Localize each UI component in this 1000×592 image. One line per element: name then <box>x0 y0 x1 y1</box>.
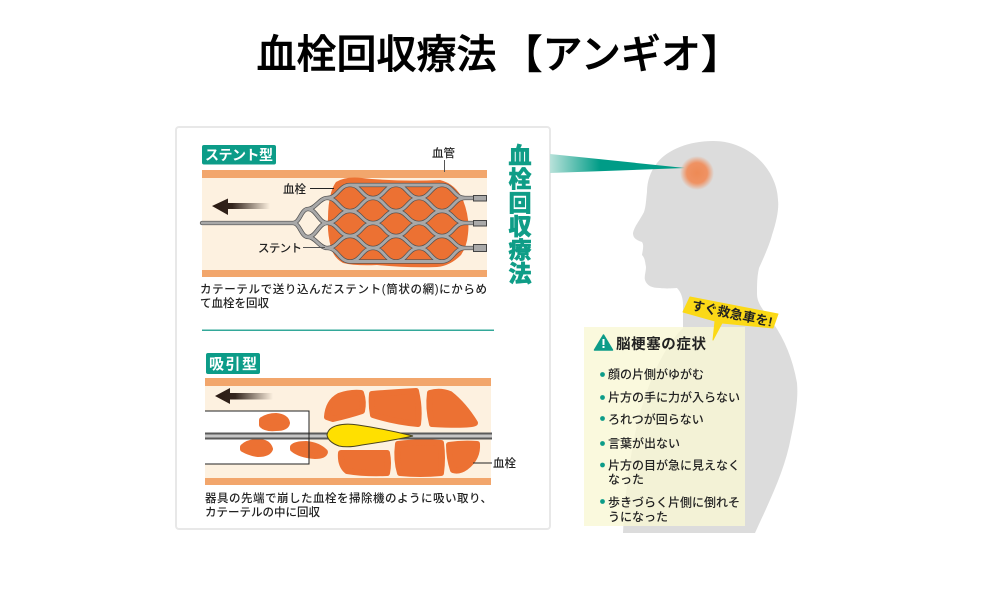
vertical heading <box>508 142 532 286</box>
symptom list: 歩きづらく片側に倒れそ <box>608 494 740 510</box>
catheter box <box>205 411 309 464</box>
symptom list: 言葉が出ない <box>608 436 680 450</box>
catheter tube <box>205 432 492 440</box>
vertical heading: 療 <box>508 237 532 263</box>
callout: call ambulance <box>683 297 778 340</box>
label: blood vessel <box>432 146 455 172</box>
symptom list: 片方の目が急に見えなく <box>608 458 740 472</box>
catheter box right edge <box>308 411 310 464</box>
vertical heading: 血 <box>508 142 532 168</box>
vertical heading: 法 <box>508 260 532 286</box>
caption: stent type: て血栓を回収 <box>200 296 269 310</box>
human silhouette <box>623 141 797 533</box>
panel: treatment methods <box>176 127 550 529</box>
label: stent <box>258 242 325 255</box>
arrow: left <box>212 198 270 215</box>
icon: warning <box>594 335 612 350</box>
stent end markers <box>474 196 486 252</box>
vertical heading: 栓 <box>508 166 532 192</box>
symptom list: 顔の片側がゆがむ <box>608 366 704 382</box>
caption: stent type: カテーテルで送り込んだステント(筒状の網)にからめ <box>200 282 487 296</box>
symptom list: なった <box>608 472 644 486</box>
stent mesh <box>202 185 474 262</box>
vertical heading: 回 <box>508 190 532 216</box>
label: stent type: ステント型 <box>205 147 273 163</box>
suction tip <box>327 424 413 447</box>
label: clot <box>473 456 516 470</box>
heading: 脳梗塞の症状 <box>616 335 706 353</box>
stroke location spot <box>680 156 714 190</box>
clot fragments <box>243 391 477 474</box>
label: blood vessel: 血管 <box>432 146 455 160</box>
callout: call ambulance: すぐ救急車を! <box>690 298 774 330</box>
diagram: stent type vessel <box>202 170 487 277</box>
caption: aspiration type: カテーテルの中に回収 <box>205 505 320 519</box>
arrow: left <box>215 388 273 404</box>
vertical heading: 収 <box>508 214 532 240</box>
symptom list: 片方の手に力が入らない <box>608 390 740 404</box>
label: aspiration type: 吸引型 <box>209 356 257 373</box>
symptom list <box>600 366 740 524</box>
label: clot <box>283 182 334 196</box>
panel: symptoms <box>584 327 745 526</box>
diagram: aspiration type vessel <box>205 378 492 485</box>
symptom list: ろれつが回らない <box>608 412 704 426</box>
label: clot: 血栓 <box>283 182 306 196</box>
title: 血栓回収療法【アンギオ】 <box>256 33 741 77</box>
blood clot <box>328 178 468 267</box>
divider <box>202 330 494 331</box>
beam from heading to brain <box>550 154 685 173</box>
label: stent: ステント <box>258 242 302 255</box>
caption: aspiration type: 器具の先端で崩した血栓を掃除機のように吸い取り、 <box>205 491 492 505</box>
symptom list: うになった <box>608 510 668 524</box>
label: clot: 血栓 <box>493 456 516 470</box>
